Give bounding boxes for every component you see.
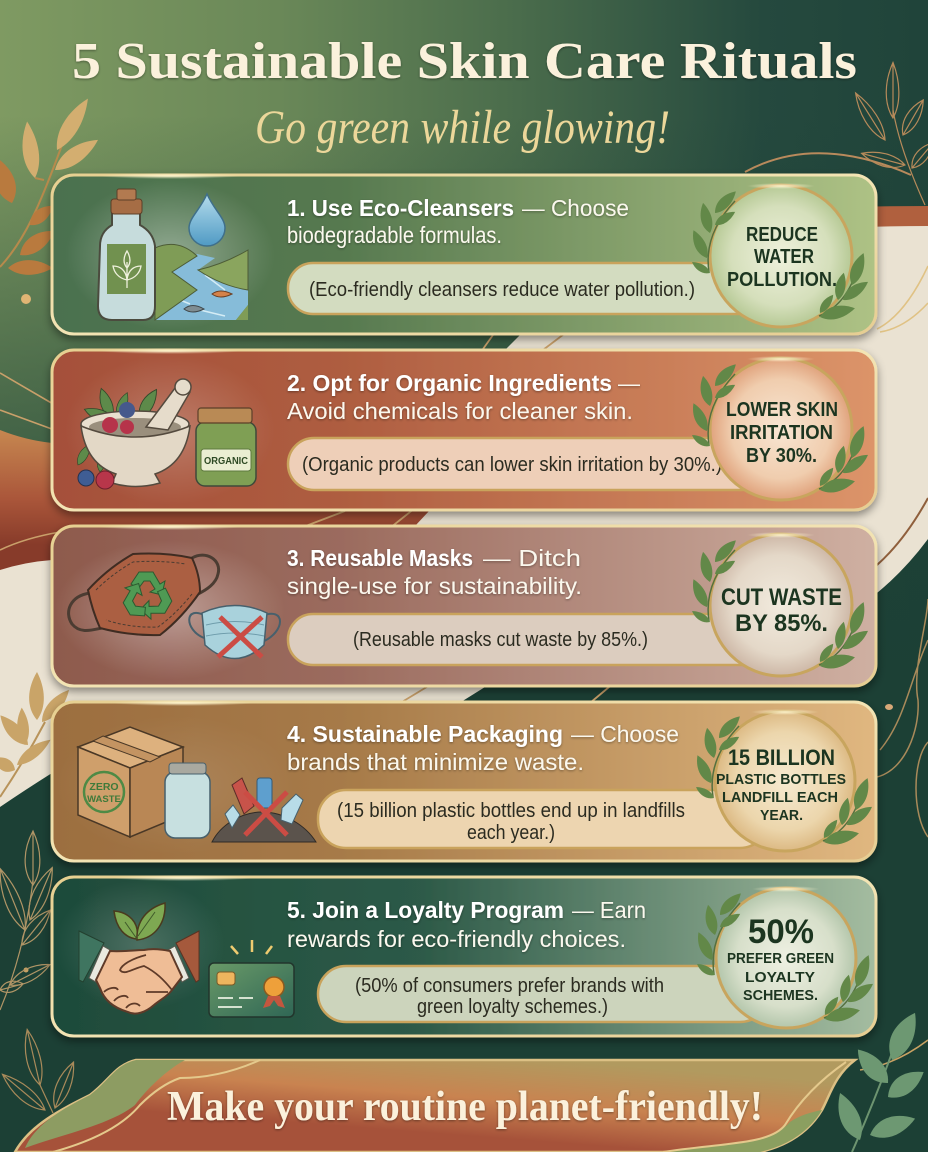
decoration: left lower outline leaves (0, 831, 59, 1010)
badge (688, 532, 871, 676)
badge (693, 886, 876, 1028)
icon: cloth and disposable masks (69, 554, 280, 658)
badge: SCHEMES. (743, 988, 818, 1004)
heading line 2: single-use for sustainability. (287, 573, 582, 599)
note text: (Eco-friendly cleansers reduce water pollution.) (309, 279, 695, 301)
badge: 15 BILLION (728, 745, 835, 770)
icon: box, jar and landfill: WASTE (87, 794, 121, 805)
footer slogan: Make your routine planet-friendly! (167, 1084, 763, 1130)
note text: (Reusable masks cut waste by 85%.) (353, 629, 648, 651)
badge: YEAR. (760, 807, 803, 824)
panel: ritual 1 eco-cleansers (52, 173, 876, 334)
panel: ritual 3 reusable masks (52, 524, 876, 686)
badge: POLLUTION. (727, 269, 837, 291)
icon: mortar and organic jar (74, 379, 256, 489)
heading regular: — Choose (522, 195, 629, 221)
badge: CUT WASTE (721, 584, 842, 611)
pill note (288, 263, 768, 314)
heading line 2: biodegradable formulas. (287, 222, 502, 248)
heading bold: 3. Reusable Masks (287, 545, 473, 571)
decoration: left cream gold leaves (0, 672, 73, 797)
heading regular: — Choose (571, 721, 679, 747)
badge: LANDFILL EACH (722, 789, 838, 806)
badge: PREFER GREEN (727, 951, 834, 967)
footer banner (15, 1008, 928, 1152)
panel: ritual 4 sustainable packaging (52, 700, 876, 861)
heading bold: 1. Use Eco-Cleansers (287, 195, 514, 221)
heading dash: — (618, 370, 640, 396)
panel: ritual 2 organic ingredients (52, 348, 876, 510)
panel: ritual 5 loyalty program (52, 875, 876, 1036)
icon: box, jar and landfill: ZERO (89, 781, 119, 793)
pill note (318, 790, 768, 848)
badge: REDUCE (746, 224, 818, 246)
decoration: bottom-left outline leaves (0, 1028, 79, 1116)
badge: WATER (754, 246, 814, 268)
note text: (15 billion plastic bottles end up in landfills (337, 800, 685, 822)
pill note (318, 966, 768, 1022)
badge: LOWER SKIN (726, 399, 838, 421)
heading regular: — Earn (572, 897, 646, 923)
note text line 2: green loyalty schemes.) (417, 996, 608, 1018)
subtitle: Go green while glowing! (255, 101, 670, 154)
decoration: top-left gold leaves (0, 94, 102, 275)
pill note (288, 438, 768, 490)
note text line 2: each year.) (467, 822, 555, 844)
note text: (Organic products can lower skin irritation by 30%.) (302, 454, 722, 476)
icon: mortar and organic jar: ORGANIC (204, 456, 248, 467)
title: 5 Sustainable Skin Care Rituals (72, 33, 857, 90)
heading line 2: Avoid chemicals for cleaner skin. (287, 398, 633, 424)
badge (688, 356, 871, 500)
heading line 2: brands that minimize waste. (287, 749, 584, 775)
badge: PLASTIC BOTTLES (716, 771, 846, 788)
heading regular: — Ditch (483, 545, 581, 571)
badge: 50% (748, 913, 814, 951)
badge (692, 709, 875, 851)
decoration: bottom-right green leaves (831, 1008, 928, 1152)
badge (688, 183, 871, 327)
badge: LOYALTY (745, 970, 815, 986)
heading line 2: rewards for eco-friendly choices. (287, 926, 626, 952)
heading bold: 2. Opt for Organic Ingredients (287, 370, 612, 396)
badge: IRRITATION (730, 422, 833, 444)
heading bold: 4. Sustainable Packaging (287, 721, 563, 747)
badge: BY 85%. (735, 610, 828, 637)
decoration: top-right outline leaves (850, 62, 928, 205)
icon: bottle and river (98, 189, 248, 320)
pill note (288, 614, 768, 665)
note text: (50% of consumers prefer brands with (355, 975, 664, 997)
icon: box, jar and landfill (78, 727, 316, 842)
badge: BY 30%. (746, 445, 817, 467)
icon: handshake and rewards card (79, 903, 294, 1017)
heading bold: 5. Join a Loyalty Program (287, 897, 564, 923)
